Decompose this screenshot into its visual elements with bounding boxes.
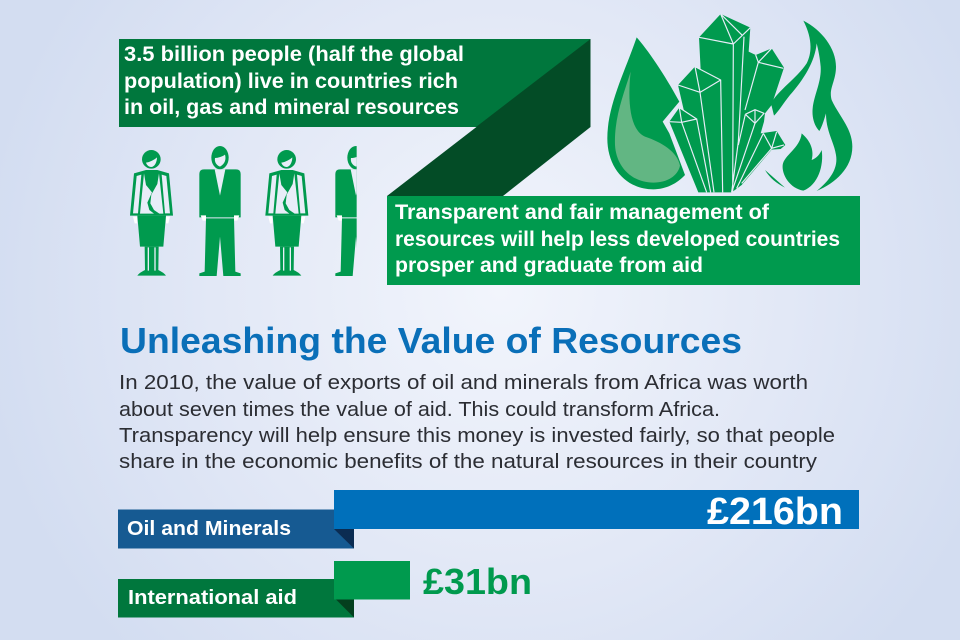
heading: Unleashing the Value of Resources (120, 320, 742, 361)
icon: gas flame (765, 21, 852, 191)
bar chart: international aid (118, 561, 532, 618)
text block: intro paragraph (119, 372, 835, 473)
icon: oil drop (607, 37, 685, 189)
text block: intro paragraph: about seven times the value of aid. This could transform Africa. (119, 399, 720, 421)
bar chart: oil and minerals: £216bn (707, 491, 843, 533)
bar chart: oil and minerals: Oil and Minerals (127, 518, 291, 540)
text block: intro paragraph: In 2010, the value of exports of oil and minerals from Africa was worth (119, 372, 808, 394)
panel: population callout: 3.5 billion people (half the global (124, 43, 464, 66)
panel: population callout: in oil, gas and mineral resources (124, 96, 459, 119)
panel: population callout: population) live in countries rich (124, 70, 458, 93)
panel: ribbon fold connecting callouts (387, 39, 590, 196)
panel: transparency callout (387, 196, 860, 285)
panel: transparency callout: resources will help less developed countries (395, 228, 840, 251)
text block: intro paragraph: Transparency will help ensure this money is invested fairly, so that people (119, 425, 835, 447)
bar chart: international aid: £31bn (423, 561, 532, 602)
bar chart: oil and minerals (118, 490, 859, 548)
panel: transparency callout: Transparent and fair management of (395, 201, 770, 224)
icon: row of people (130, 146, 377, 276)
icon: crystals (669, 14, 785, 192)
panel: transparency callout: prosper and graduate from aid (395, 254, 703, 277)
bar chart: international aid: International aid (128, 587, 297, 609)
panel: population callout (119, 39, 590, 127)
text block: intro paragraph: share in the economic benefits of the natural resources in their country (119, 451, 817, 473)
